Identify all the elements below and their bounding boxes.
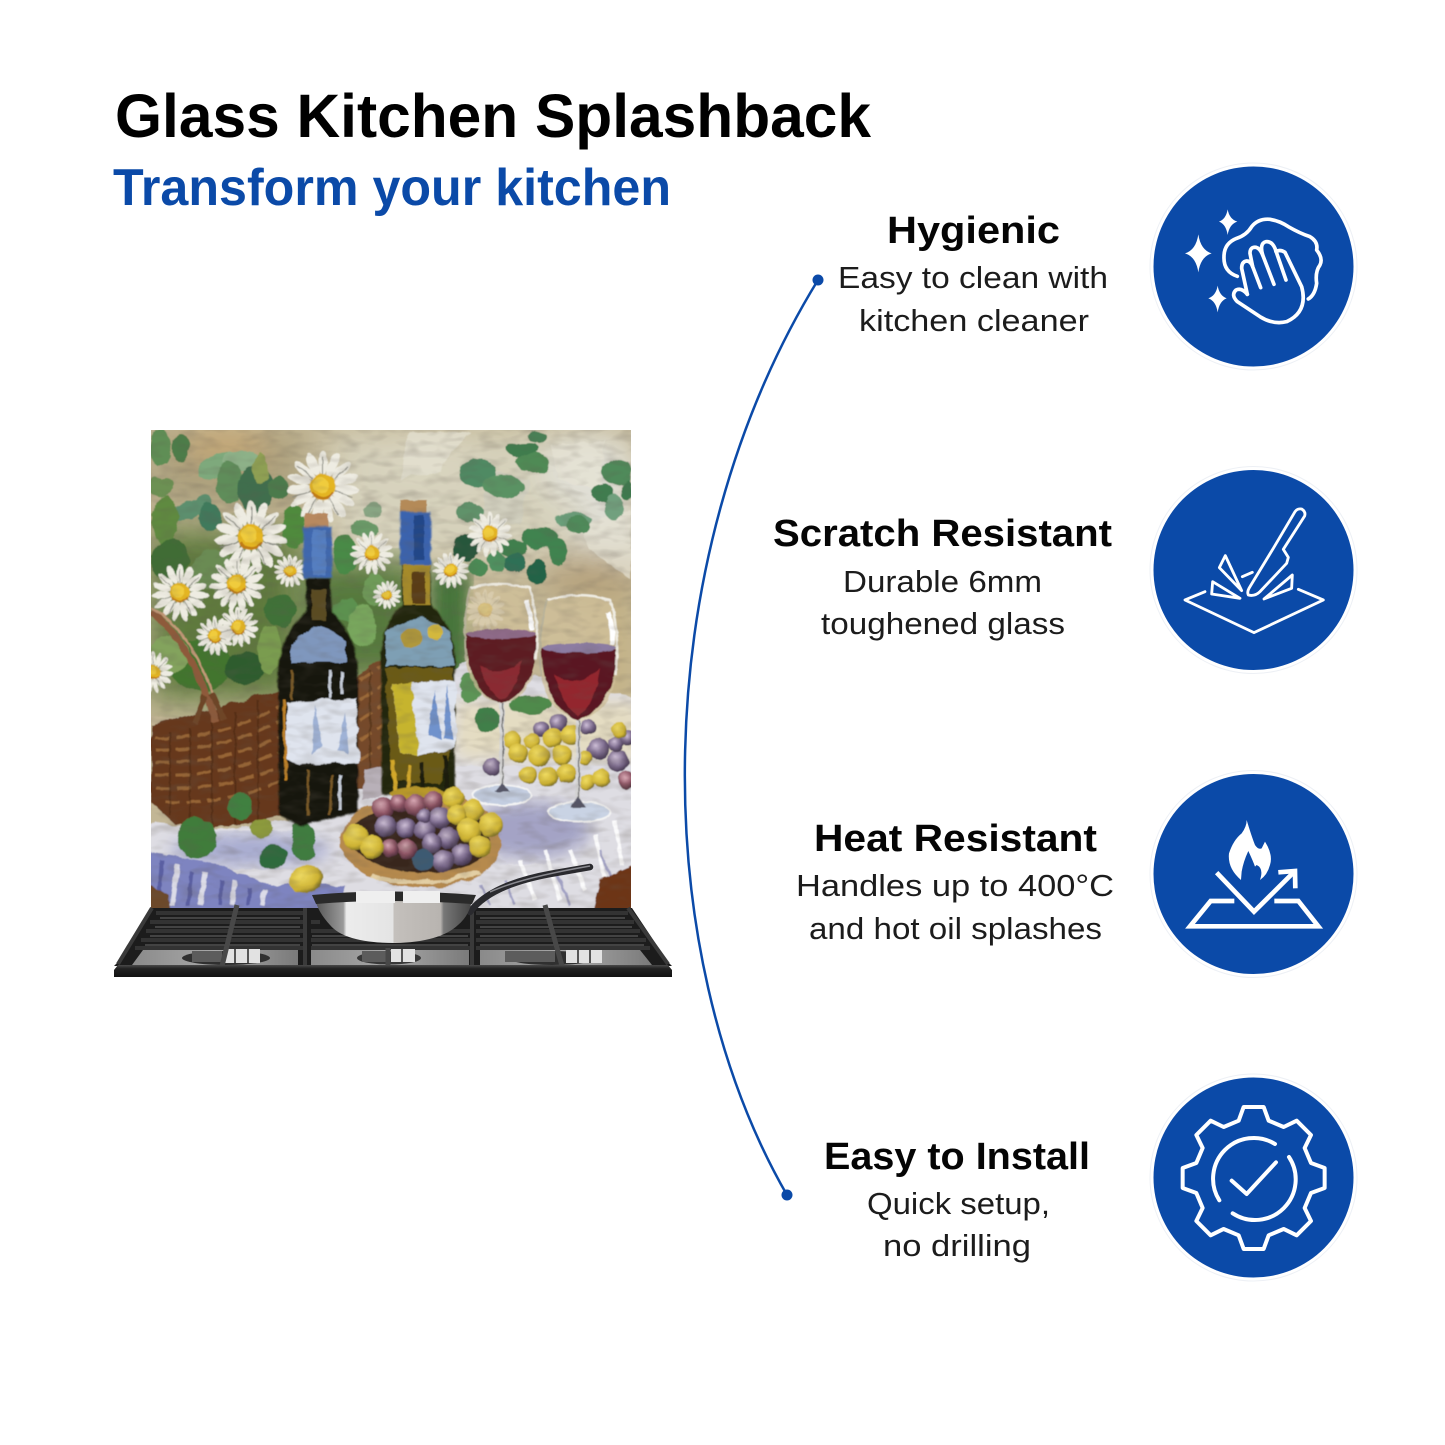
feature: hygienic text: Hygienic	[887, 210, 1060, 252]
green foliage left	[148, 429, 470, 700]
feature: hygienic text: Easy to clean with	[838, 260, 1108, 295]
connector curve	[685, 274, 824, 1200]
subtitle: Transform your kitchen	[113, 159, 671, 217]
icon: gear with check mark	[1150, 1074, 1357, 1281]
grate bars	[135, 913, 650, 948]
pan handle	[470, 867, 590, 912]
feature: hygienic text	[838, 210, 1108, 338]
grate supports	[222, 905, 562, 966]
icon: flame over surface	[1150, 770, 1357, 978]
feature: easy to install text: no drilling	[883, 1228, 1031, 1263]
feature: scratch resistant text: Durable 6mm	[843, 564, 1042, 599]
connector dot top	[812, 274, 824, 286]
lemon	[288, 864, 324, 894]
white tablecloth	[140, 660, 640, 920]
wine glass right	[540, 595, 617, 822]
infographic canvas	[114, 92, 1358, 1282]
wine bottle right	[381, 500, 455, 801]
wine glass left	[465, 584, 537, 805]
icon: hand wiping with sparkles	[1150, 163, 1357, 370]
feature: scratch resistant text	[773, 513, 1112, 641]
wicker basket	[151, 608, 385, 828]
green leaves right	[453, 431, 632, 585]
feature: easy to install text: Quick setup,	[867, 1186, 1050, 1221]
feature: heat resistant text: Handles up to 400°C	[796, 868, 1114, 903]
daisy flowers	[132, 450, 513, 692]
burners	[182, 949, 602, 965]
feature: easy to install text	[824, 1136, 1090, 1263]
front bar	[114, 965, 672, 977]
frying pan	[312, 866, 590, 943]
pan bowl	[315, 899, 472, 943]
grate frame	[118, 908, 668, 966]
wine bottle left	[278, 513, 358, 826]
feature: hygienic text: kitchen cleaner	[859, 303, 1089, 338]
table leaves	[177, 792, 316, 869]
paint streak texture	[151, 430, 631, 908]
grapes behind glasses	[483, 714, 636, 790]
feature: heat resistant text: Heat Resistant	[814, 818, 1097, 860]
wooden plate with grapes	[340, 787, 503, 888]
feature: scratch resistant text: toughened glass	[821, 606, 1065, 641]
title: Glass Kitchen Splashback	[115, 82, 871, 150]
painting background	[151, 430, 631, 830]
feature: easy to install text: Easy to Install	[824, 1136, 1090, 1178]
hob body	[114, 908, 672, 966]
connector dot bottom	[782, 1190, 792, 1200]
feature: heat resistant text: and hot oil splashes	[809, 911, 1102, 946]
product image: painted splashback	[151, 430, 631, 908]
feature: scratch resistant text: Scratch Resistant	[773, 513, 1112, 555]
gas hob	[114, 905, 672, 977]
icon: knife on glass surface	[1150, 466, 1357, 674]
feature: heat resistant text	[796, 818, 1114, 946]
steel surfaces	[132, 950, 652, 965]
